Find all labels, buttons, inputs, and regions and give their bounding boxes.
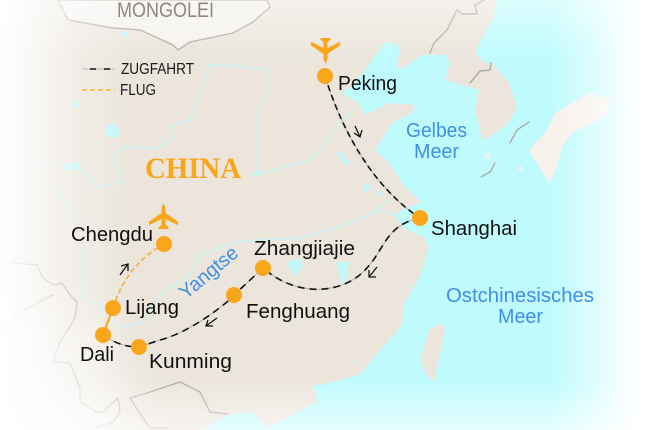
icon: plane at Peking	[310, 38, 340, 64]
icon: plane at Chengdu	[148, 203, 178, 229]
route: train Zhangjiajie to Dali	[103, 268, 263, 347]
stop: Dali: Dali	[80, 344, 114, 366]
stop: Shanghai	[412, 210, 517, 240]
direction arrow: to Kunming	[206, 318, 217, 326]
legend: flight line	[82, 89, 115, 91]
rivers and lakes	[30, 31, 405, 328]
stop: Fenghuang: Fenghuang	[246, 301, 350, 323]
direction arrow: to Chengdu	[120, 264, 128, 275]
route: flight Lijang to Chengdu	[113, 244, 164, 308]
stop: Dali	[80, 327, 114, 366]
stop: Lijang: Lijang	[125, 297, 179, 319]
legend	[82, 61, 194, 99]
direction arrow: Peking to Shanghai	[354, 126, 362, 137]
land: Korean islands	[484, 153, 523, 171]
sea label: Ostchinesisches Meer: Meer	[498, 306, 543, 328]
route: Dali to Lijang	[103, 308, 113, 335]
sea label: Ostchinesisches Meer: Ostchinesisches	[446, 285, 594, 307]
sea label: Ostchinesisches Meer	[446, 285, 594, 328]
river label: Yangtse: Yangtse	[175, 242, 243, 304]
stop: Shanghai: Shanghai	[431, 218, 517, 240]
stop: Chengdu	[71, 224, 172, 252]
stop: Zhangjiajie	[254, 238, 355, 276]
sea label: Gelbes Meer: Gelbes	[406, 120, 467, 142]
direction arrow: to Zhangjiajie	[369, 267, 377, 277]
legend: Zugfahrt: ZUGFAHRT	[121, 61, 194, 78]
sea label: Gelbes Meer: Meer	[414, 141, 459, 163]
route: train Peking to Shanghai	[325, 76, 420, 218]
legend: Flug: FLUG	[120, 82, 156, 99]
land: Taiwan	[421, 323, 445, 382]
label: China: CHINA	[145, 152, 241, 185]
legend: train line	[82, 68, 115, 70]
stop: Kunming	[131, 339, 232, 373]
stop: Fenghuang	[226, 287, 350, 323]
region: Mongolia	[58, 0, 270, 50]
stop: Chengdu: Chengdu	[71, 224, 153, 246]
stop: Zhangjiajie: Zhangjiajie	[254, 238, 355, 260]
stop: Peking	[317, 68, 397, 95]
sea label: Gelbes Meer	[406, 120, 467, 163]
route: train Shanghai to Zhangjiajie	[263, 218, 420, 289]
stop: Peking: Peking	[338, 73, 397, 95]
stop: Kunming: Kunming	[149, 351, 232, 373]
land: Japan	[529, 93, 612, 183]
